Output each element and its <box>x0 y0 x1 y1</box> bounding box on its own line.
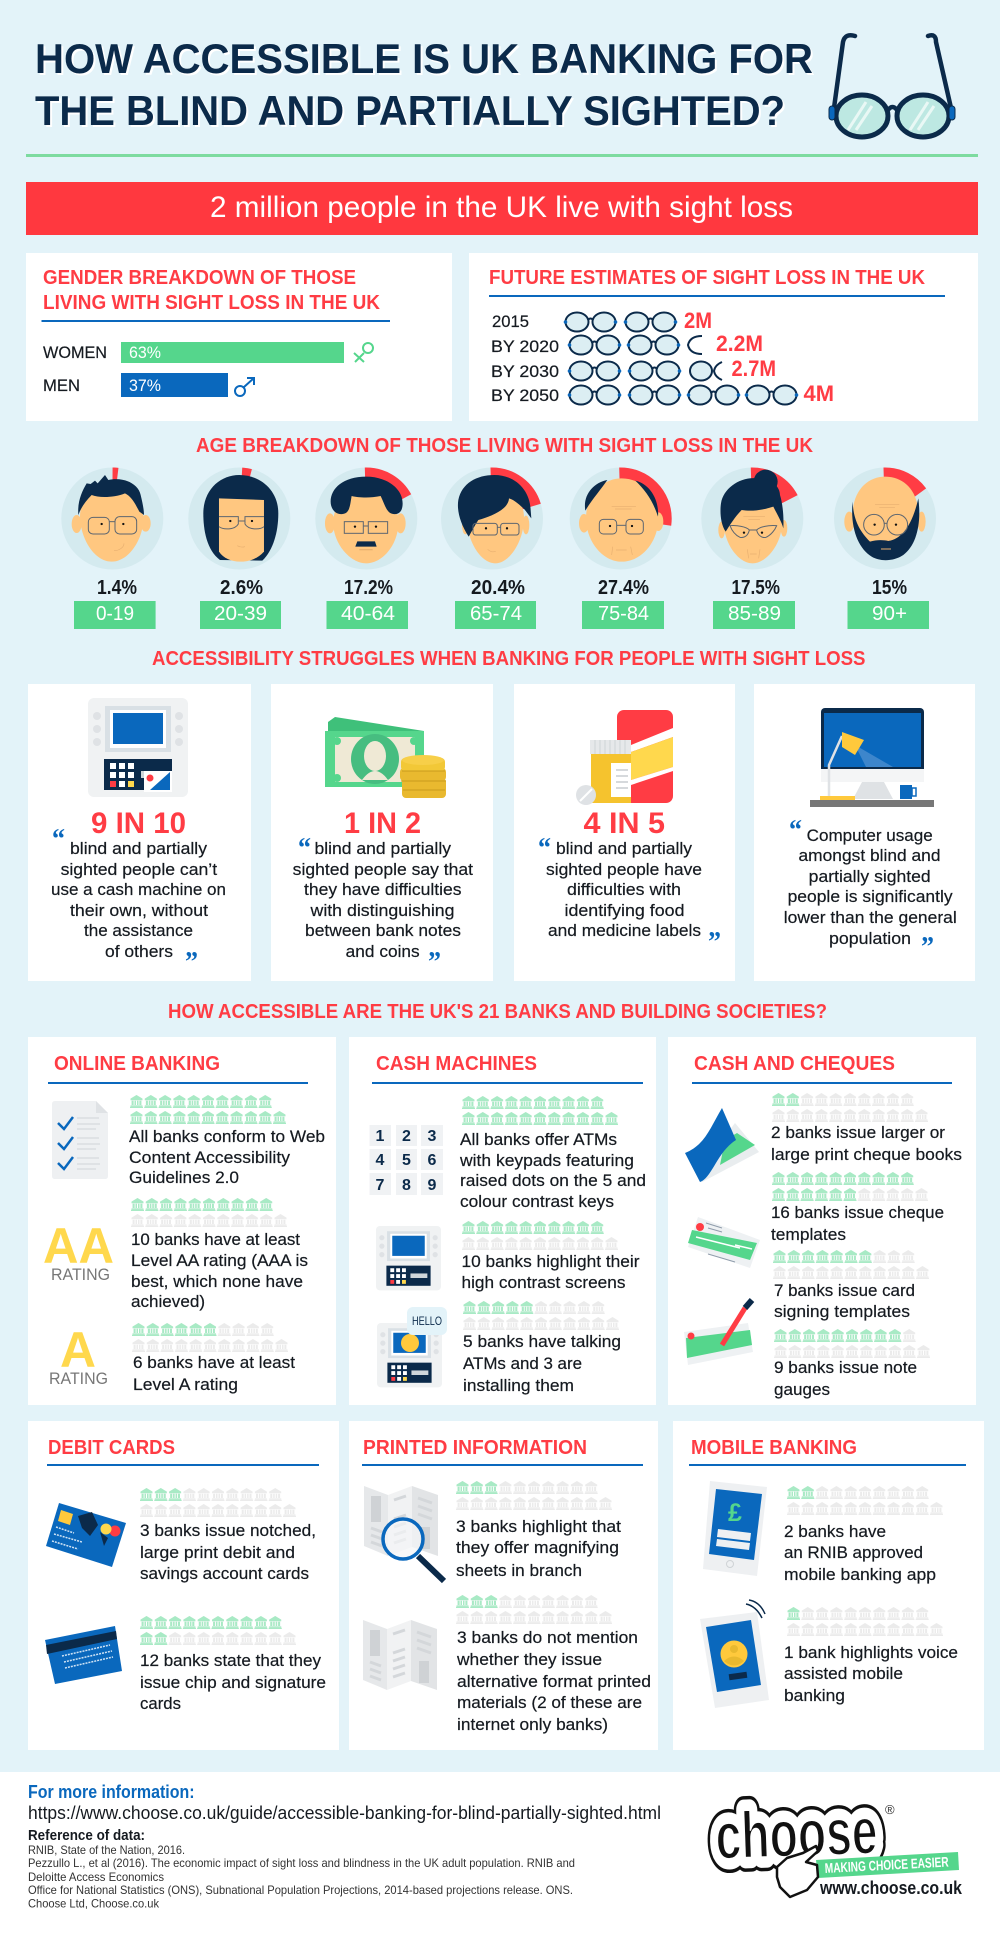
chart: age 90+: 15% <box>872 577 907 599</box>
chart: age 75-84: 75-84 <box>598 603 649 625</box>
heading: gender <box>43 267 381 314</box>
text: WCAG: All banks conform to Web <box>129 1128 325 1146</box>
bar: women 63%: 63% <box>129 343 161 362</box>
text: alternative format: 3 banks do not mention <box>457 1629 638 1647</box>
chart: age 90+: 90+ <box>872 603 907 625</box>
text: references: Choose Ltd, Choose.co.uk <box>28 1896 160 1910</box>
heading: uk banks: HOW ACCESSIBLE ARE THE UK'S 21 BANKS AND BUILDING SOCIETIES? <box>168 1001 827 1023</box>
bank icons: 10 of 21 <box>131 1198 287 1227</box>
text: bank notes stat: blind and partially <box>314 839 452 858</box>
icon: bank notes and coins <box>325 717 446 798</box>
panel: printed information <box>349 1421 658 1750</box>
bank icons: 12 of 21 <box>140 1616 296 1645</box>
text: note gauges: gauges <box>774 1381 830 1399</box>
text: alternative format <box>456 1629 651 1734</box>
icon: leaflet and magnifier <box>364 1486 444 1581</box>
text: cash machine stat: their own, without <box>70 901 208 920</box>
text: RNIB app: 2 banks have <box>784 1523 886 1541</box>
text: cash machine stat: of others <box>105 942 173 961</box>
text: references: Reference of data: <box>28 1827 145 1844</box>
text: cheque templates: 16 banks issue cheque <box>771 1204 944 1222</box>
text: computer usage: amongst blind and <box>798 846 940 865</box>
bar: women 63%: WOMEN <box>43 343 107 362</box>
row: by 2030 2.7M <box>491 356 776 381</box>
text: cash machine stat: blind and partially <box>70 839 208 858</box>
bank icons: 6 of 21 <box>132 1323 288 1352</box>
text: voice assisted: assisted mobile <box>784 1665 903 1683</box>
icon: glasses <box>829 35 955 137</box>
icon: keypad: 4 <box>376 1152 385 1169</box>
icon: keypad: 2 <box>402 1128 411 1145</box>
row: 2015 2M: 2015 <box>492 312 529 331</box>
chart: age 0-19 <box>61 468 163 629</box>
logo: choose: MAKING CHOICE EASIER <box>824 1854 949 1876</box>
logo: choose <box>714 1793 963 1898</box>
stat: 1 in 2: 1 IN 2 <box>344 807 421 840</box>
icon: face 3 <box>325 477 406 563</box>
icon: open quote: “ <box>538 833 551 864</box>
chart: age 65-74: 20.4% <box>471 577 525 599</box>
text: bank notes stat: sighted people say that <box>293 860 473 879</box>
text: level A <box>133 1354 295 1394</box>
panel: online banking <box>28 1037 336 1405</box>
text: magnifying sheets: sheets in branch <box>456 1562 582 1580</box>
row: by 2030 2.7M: 2.7M <box>732 356 776 381</box>
title <box>35 35 813 134</box>
icon: AA rating: RATING <box>51 1265 110 1284</box>
panel: cash machines <box>349 1037 656 1405</box>
text: note gauges: 9 banks issue note <box>774 1359 917 1377</box>
bank icons: 3 of 21 <box>456 1481 612 1510</box>
icon: cheque templates <box>688 1217 760 1268</box>
icon: keypad: 5 <box>402 1152 411 1169</box>
icon: face 7 <box>844 477 926 560</box>
row: 2015 2M <box>492 308 712 333</box>
text: level AA: 10 banks have at least <box>131 1231 300 1249</box>
icon: cheque and pen <box>684 1300 753 1365</box>
text: cash machine stat: the assistance <box>84 921 193 940</box>
panel: 4 in 5 <box>514 684 735 981</box>
chart: age 75-84 <box>570 468 672 629</box>
text: magnifying sheets <box>456 1518 621 1580</box>
bank icons: 3 of 21 <box>140 1488 296 1517</box>
icon: A rating: RATING <box>49 1369 108 1388</box>
text: more information <box>28 1782 661 1823</box>
text: bank notes stat: they have difficulties <box>304 880 462 899</box>
icon: face 1 <box>72 475 151 562</box>
heading: future estimates: FUTURE ESTIMATES OF SIGHT LOSS IN THE UK <box>489 267 926 289</box>
text: references <box>28 1827 575 1910</box>
bank icons: 1 of 21 <box>787 1607 943 1636</box>
text: voice assisted <box>784 1644 958 1705</box>
text: magnifying sheets: they offer magnifying <box>456 1539 619 1557</box>
icon: face 4 <box>458 475 531 563</box>
text: labels stat: difficulties with <box>567 880 681 899</box>
bank icons: 10 of 21 <box>462 1221 618 1250</box>
bank icons: 16 of 21 <box>772 1172 928 1201</box>
text: alternative format: alternative format printed <box>457 1673 651 1691</box>
heading: debit cards: DEBIT CARDS <box>48 1437 175 1459</box>
chart: age 75-84: 27.4% <box>598 577 649 599</box>
icon: keypad: 3 <box>428 1128 437 1145</box>
icon: computer and lamp <box>810 708 934 807</box>
text: cheque books <box>771 1124 962 1164</box>
panel: mobile banking <box>673 1421 984 1750</box>
text: talking ATMs: 5 banks have talking <box>463 1333 621 1351</box>
text: cash machine stat <box>51 839 226 961</box>
panel: computer usage <box>754 684 975 981</box>
text: card signing: 7 banks issue card <box>774 1282 915 1300</box>
icon: checklist document <box>52 1101 108 1179</box>
bar: men 37%: MEN <box>43 376 80 395</box>
text: references: Deloitte Access Economics <box>28 1870 164 1884</box>
text: labels stat: blind and partially <box>556 839 693 858</box>
bank icons: 5 of 21 <box>463 1301 619 1330</box>
chart: age 65-74: 65-74 <box>470 603 522 625</box>
text: notched cards: savings account cards <box>140 1565 309 1583</box>
stat: 4 in 5: 4 IN 5 <box>584 807 665 840</box>
icon: debit card front <box>46 1503 126 1567</box>
chart: age 0-19: 0-19 <box>96 603 134 625</box>
bank icons: 3 of 21 <box>456 1595 612 1624</box>
icon: phone with voice <box>700 1600 769 1708</box>
bank icons: 9 of 21 <box>774 1329 930 1358</box>
icon: close quote: ” <box>185 947 198 978</box>
text: notched cards: large print debit and <box>140 1544 295 1562</box>
icon: talking ATM: HELLO <box>412 1314 442 1328</box>
footer <box>0 1772 1000 1939</box>
heading: cash and cheques: CASH AND CHEQUES <box>694 1053 895 1075</box>
chart: age 85-89: 17.5% <box>732 577 780 599</box>
text: RNIB app: mobile banking app <box>784 1566 936 1584</box>
banner: 2 million people <box>26 182 978 235</box>
text: bank notes stat: and coins <box>346 942 420 961</box>
text: level AA <box>131 1231 308 1311</box>
text: level AA: achieved) <box>131 1293 205 1311</box>
icon: keypad: 7 <box>376 1177 385 1194</box>
icon: keypad <box>370 1125 443 1195</box>
text: chip and signature: 12 banks state that they <box>140 1652 322 1670</box>
text: labels stat: sighted people have <box>546 860 702 879</box>
text: cheque templates: templates <box>771 1226 846 1244</box>
icon: food can and medicine <box>576 710 673 805</box>
bar: men 37% <box>43 373 228 397</box>
bank icons: 21 of 21 <box>462 1096 618 1125</box>
text: labels stat: identifying food <box>564 901 684 920</box>
icon: open quote: “ <box>298 833 311 864</box>
bar: men 37%: 37% <box>129 376 161 395</box>
text: WCAG: Guidelines 2.0 <box>129 1169 239 1187</box>
text: WCAG <box>129 1128 325 1187</box>
icon: close quote: ” <box>428 947 441 978</box>
chart: age 90+ <box>834 468 936 629</box>
text: computer usage: lower than the general <box>784 908 957 927</box>
text: alternative format: materials (2 of these are <box>457 1694 642 1712</box>
logo: choose: choose <box>714 1793 879 1873</box>
text: computer usage <box>784 826 957 948</box>
text: labels stat: and medicine labels <box>548 921 701 940</box>
bank icons: 21 of 21 <box>130 1095 286 1124</box>
text: keypads: All banks offer ATMs <box>460 1131 617 1149</box>
icon: open quote: “ <box>52 824 65 855</box>
chart: age 85-89: 85-89 <box>728 603 781 625</box>
text: level AA: Level AA rating (AAA is <box>131 1252 308 1270</box>
text: keypads <box>459 1131 646 1211</box>
icon: A rating: A <box>60 1322 96 1378</box>
heading: cash machines: CASH MACHINES <box>376 1053 537 1075</box>
text: card signing <box>774 1282 915 1321</box>
icon: keypad: 9 <box>428 1177 437 1194</box>
icon: debit card back <box>45 1626 122 1684</box>
icon: phone with pound: £ <box>728 1499 742 1527</box>
row: 2015 2M: 2M <box>684 308 712 333</box>
title: HOW ACCESSIBLE IS UK BANKING FOR <box>35 35 813 82</box>
icon: A rating <box>49 1322 108 1388</box>
icon: AA rating: AA <box>43 1218 114 1274</box>
text: high contrast <box>462 1253 640 1292</box>
text: talking ATMs: installing them <box>463 1377 574 1395</box>
icon: male symbol <box>235 378 254 396</box>
text: computer usage: Computer usage <box>807 826 933 845</box>
text: chip and signature: cards <box>140 1695 181 1713</box>
chart: age 40-64: 40-64 <box>341 603 395 625</box>
heading: printed information: PRINTED INFORMATION <box>363 1437 587 1459</box>
heading: online banking: ONLINE BANKING <box>54 1053 220 1075</box>
row: by 2050 4M <box>491 381 834 406</box>
logo: choose: ® <box>885 1802 895 1817</box>
row: by 2050 4M: 4M <box>804 381 834 406</box>
chart: age 40-64 <box>315 468 417 629</box>
logo: choose: www.choose.co.uk <box>819 1878 963 1898</box>
text: bank notes stat: between bank notes <box>305 921 461 940</box>
row: by 2020 2.2M: 2.2M <box>716 331 763 356</box>
icon: talking ATM <box>377 1307 447 1387</box>
text: RNIB app <box>784 1523 936 1584</box>
icon: cheque book <box>685 1108 759 1182</box>
text: RNIB app: an RNIB approved <box>784 1544 923 1562</box>
text: more information: https://www.choose.co.uk/guide/accessible-banking-for-blind-partially-sighted.html <box>28 1803 661 1823</box>
text: computer usage: population <box>829 929 911 948</box>
logo: choose: choose <box>714 1793 879 1873</box>
text: notched cards: 3 banks issue notched, <box>140 1522 316 1540</box>
icon: keypad: 8 <box>402 1177 411 1194</box>
text: level A: 6 banks have at least <box>133 1354 295 1372</box>
text: cheque books: 2 banks issue larger or <box>771 1124 946 1142</box>
text: note gauges <box>774 1359 917 1399</box>
panel: debit cards <box>28 1421 339 1750</box>
text: cheque templates <box>771 1204 944 1244</box>
text: high contrast: high contrast screens <box>462 1274 626 1292</box>
heading: mobile banking: MOBILE BANKING <box>691 1437 857 1459</box>
row: by 2020 2.2M: BY 2020 <box>491 337 559 356</box>
bar: women 63% <box>43 342 344 363</box>
text: references: Office for National Statistics (ONS), Subnational Population Projections, 2014-based projections release. ONS. <box>28 1883 573 1897</box>
chart: age 40-64: 17.2% <box>344 577 393 599</box>
text: cheque books: large print cheque books <box>771 1146 962 1164</box>
text: WCAG: Content Accessibility <box>129 1149 291 1167</box>
panel: cash and cheques <box>668 1037 976 1405</box>
text: alternative format: whether they issue <box>456 1651 602 1669</box>
icon: face 2 <box>203 475 278 562</box>
text: voice assisted: banking <box>784 1687 845 1705</box>
icon: close quote: ” <box>708 927 721 958</box>
text: high contrast: 10 banks highlight their <box>462 1253 640 1271</box>
row: by 2020 2.2M <box>491 331 763 356</box>
icon: high contrast ATM <box>376 1226 441 1290</box>
text: magnifying sheets: 3 banks highlight that <box>456 1518 621 1536</box>
text: chip and signature <box>140 1652 326 1713</box>
text: keypads: with keypads featuring <box>459 1152 634 1170</box>
text: alternative format: internet only banks) <box>457 1716 608 1734</box>
panel: 9 in 10 <box>28 684 251 981</box>
text: keypads: colour contrast keys <box>460 1193 614 1211</box>
panel: future estimates <box>469 253 978 421</box>
chart: age 20-39 <box>188 468 290 629</box>
banner: 2 million people: 2 million people in the UK live with sight loss <box>210 191 793 224</box>
text: talking ATMs: ATMs and 3 are <box>463 1355 582 1373</box>
icon: keypad: 6 <box>428 1152 437 1169</box>
chart: age 20-39: 2.6% <box>220 577 263 599</box>
stat: 9 in 10: 9 IN 10 <box>91 807 186 840</box>
text: level AA: best, which none have <box>131 1273 303 1291</box>
text: computer usage: people is significantly <box>788 887 953 906</box>
text: labels stat <box>546 839 702 940</box>
text: talking ATMs <box>463 1333 621 1395</box>
icon: open quote: “ <box>789 815 802 846</box>
panel: 1 in 2 <box>271 684 493 981</box>
bank icons: 2 of 21 <box>787 1486 943 1515</box>
text: bank notes stat: with distinguishing <box>309 901 454 920</box>
icon: keypad: 1 <box>376 1128 385 1145</box>
text: notched cards <box>140 1522 316 1583</box>
heading: gender: LIVING WITH SIGHT LOSS IN THE UK <box>43 292 381 314</box>
panel: gender breakdown <box>26 253 452 421</box>
heading: age breakdown: AGE BREAKDOWN OF THOSE LIVING WITH SIGHT LOSS IN THE UK <box>196 435 814 457</box>
chart: age 65-74 <box>441 468 543 629</box>
text: voice assisted: 1 bank highlights voice <box>784 1644 958 1662</box>
text: more information: For more information: <box>28 1782 194 1802</box>
text: keypads: raised dots on the 5 and <box>460 1172 646 1190</box>
icon: face 6 <box>718 470 787 563</box>
bank icons: 2 of 21 <box>772 1093 928 1122</box>
text: card signing: signing templates <box>774 1303 910 1321</box>
row: by 2030 2.7M: BY 2030 <box>491 362 559 381</box>
text: level A: Level A rating <box>133 1376 238 1394</box>
icon: leaflet <box>363 1620 437 1690</box>
icon: phone with pound <box>703 1481 767 1576</box>
text: chip and signature: issue chip and signature <box>140 1674 326 1692</box>
heading: gender: GENDER BREAKDOWN OF THOSE <box>43 267 356 289</box>
icon: cash machine <box>88 698 188 797</box>
text: references: RNIB, State of the Nation, 2016. <box>28 1843 185 1857</box>
text: references: Pezzullo L., et al (2016). The economic impact of sight loss and blindness in the UK adult population. RNIB and <box>28 1856 575 1870</box>
bank icons: 7 of 21 <box>773 1250 929 1279</box>
title: THE BLIND AND PARTIALLY SIGHTED? <box>35 87 785 134</box>
text: cash machine stat: sighted people can’t <box>61 860 217 879</box>
icon: close quote: ” <box>921 932 934 963</box>
logo: choose: choose <box>714 1793 879 1873</box>
chart: age 20-39: 20-39 <box>214 603 267 625</box>
text: cash machine stat: use a cash machine on <box>51 880 226 899</box>
row: by 2050 4M: BY 2050 <box>491 386 559 405</box>
text: bank notes stat <box>293 839 473 961</box>
icon: female symbol <box>354 343 373 362</box>
text: computer usage: partially sighted <box>809 867 931 886</box>
heading: accessibility struggles: ACCESSIBILITY STRUGGLES WHEN BANKING FOR PEOPLE WITH SIGHT LOSS <box>152 648 866 670</box>
chart: age 85-89 <box>701 468 803 629</box>
chart: age 0-19: 1.4% <box>97 577 137 599</box>
icon: face 5 <box>579 478 663 562</box>
